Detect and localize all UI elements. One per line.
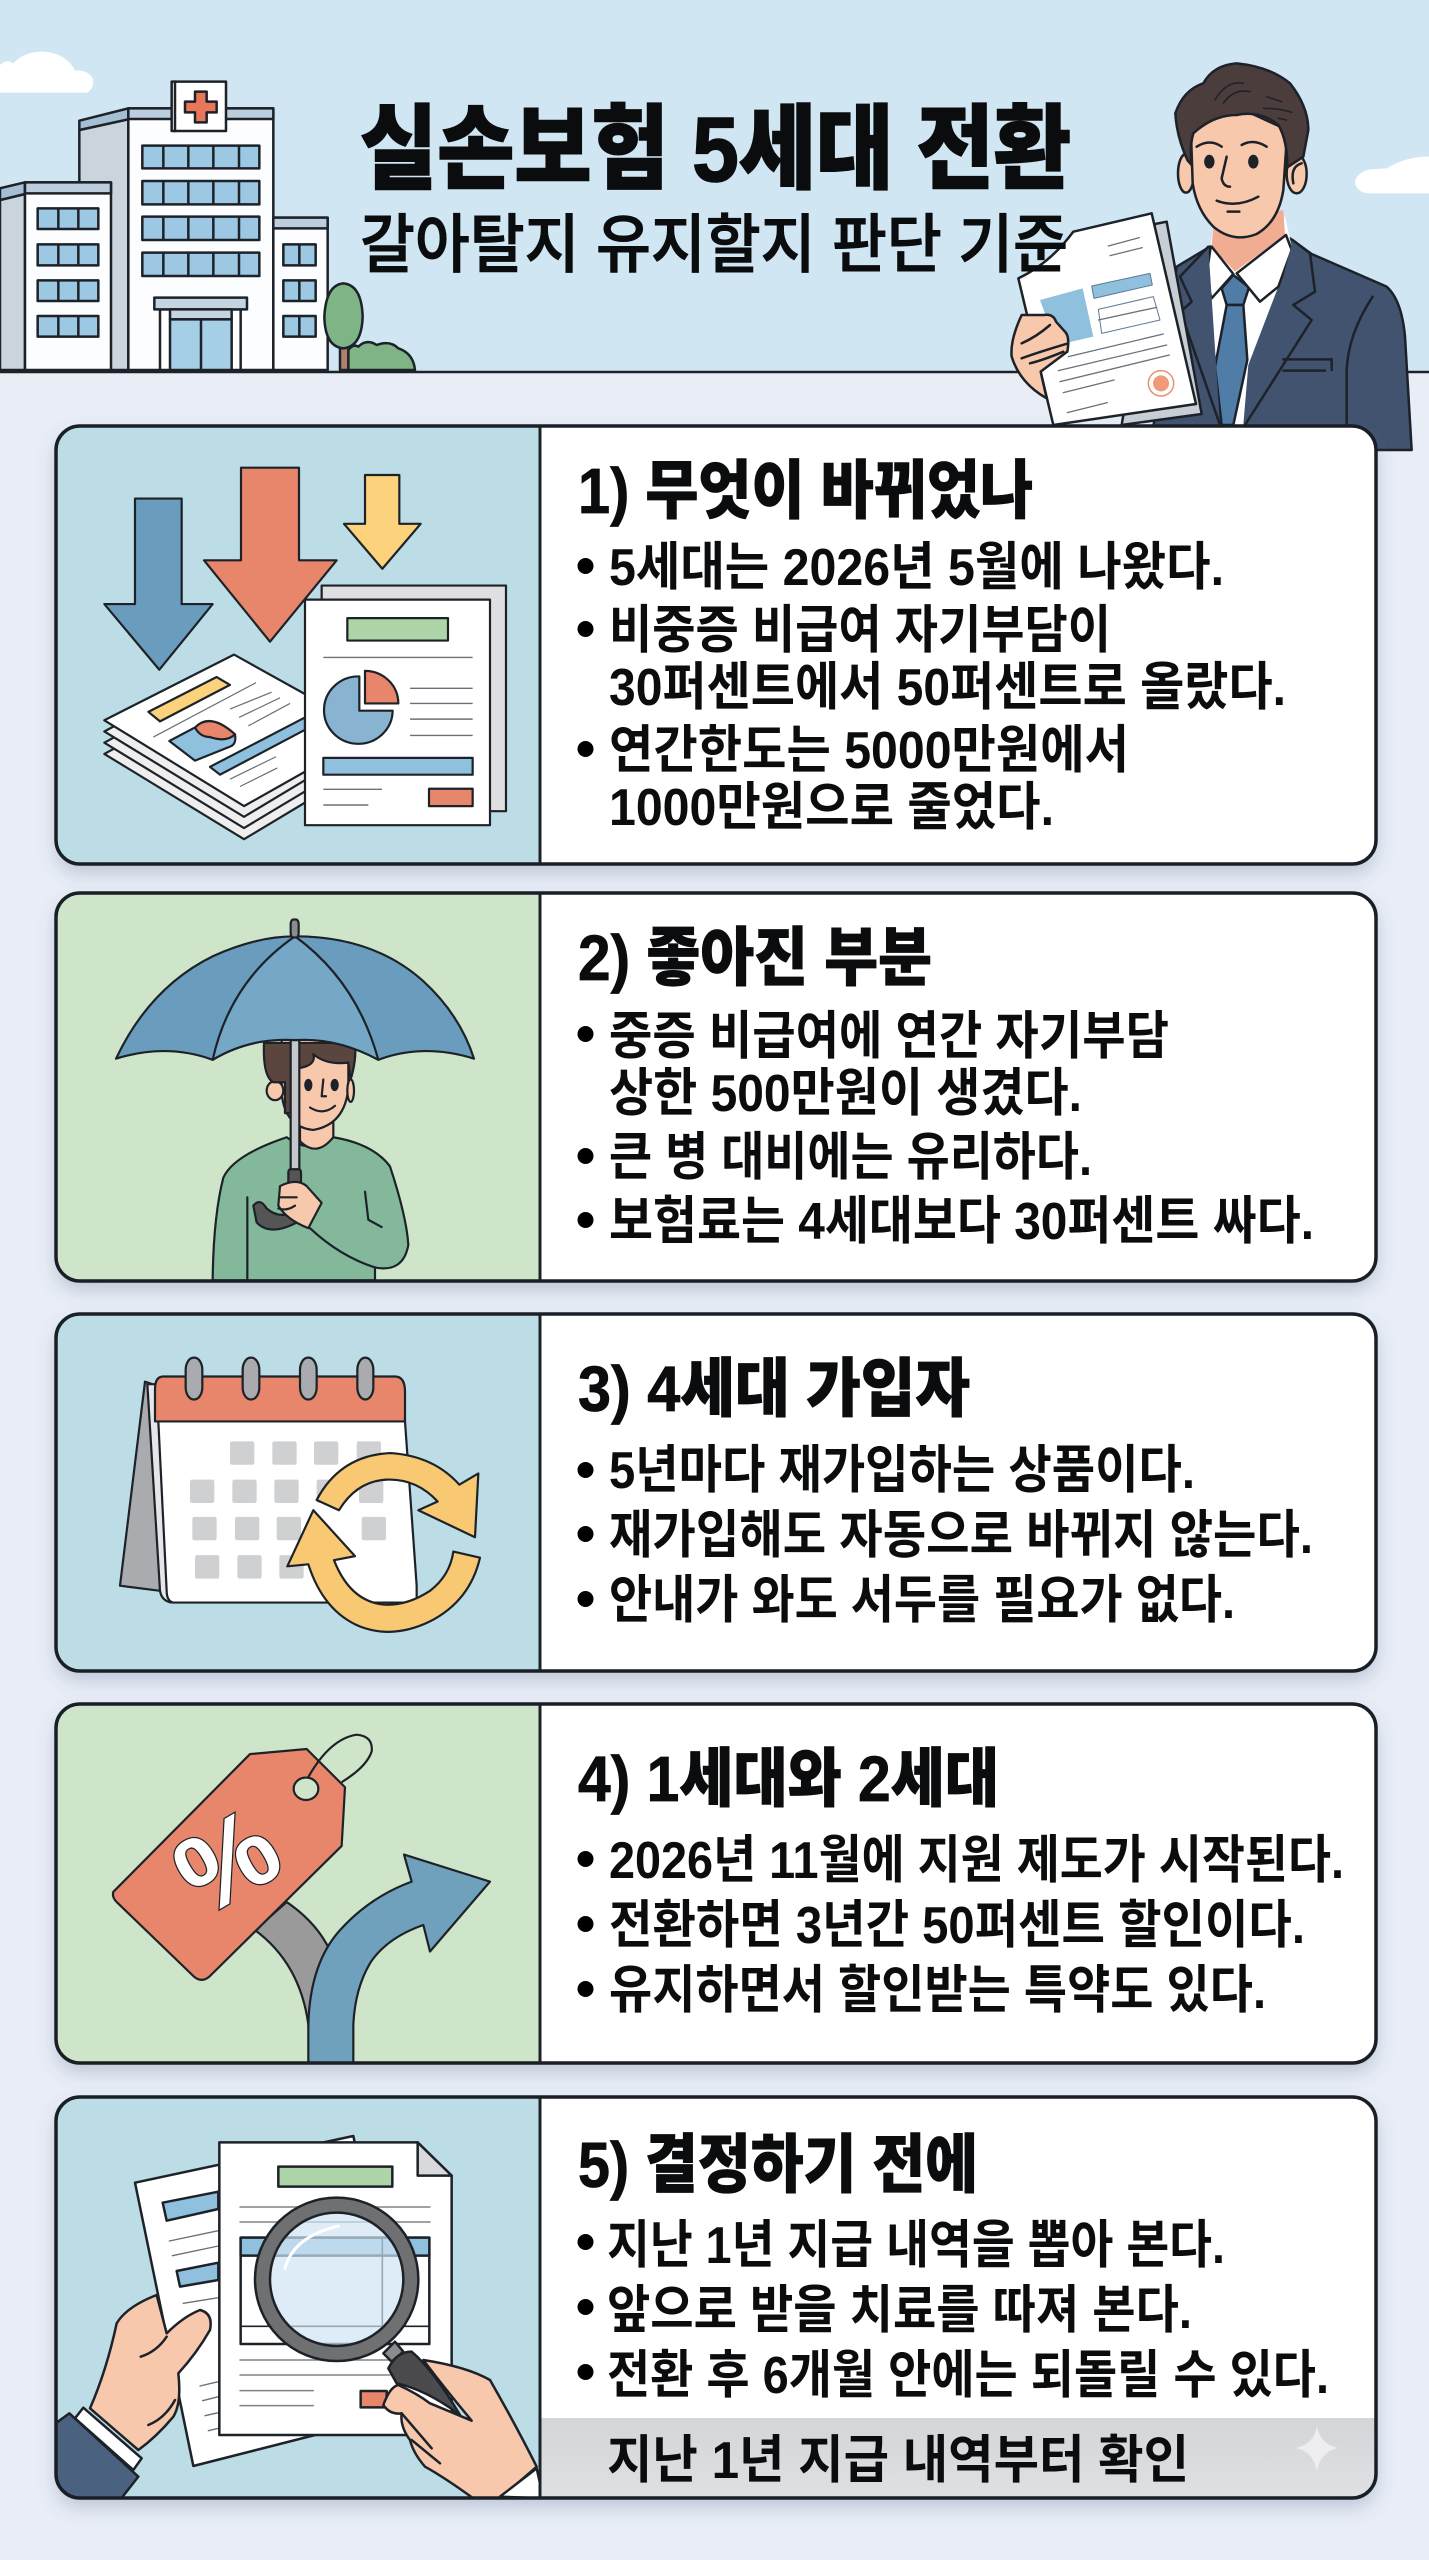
bullet list: 5년마다 재가입하는 상품이다. — [609, 1442, 1195, 1500]
subtitle: 갈아탈지 유지할지 판단 기준 — [360, 209, 1068, 281]
bullet list: 연간한도는 5000만원에서 — [609, 722, 1129, 780]
bullet list: 2026년 11월에 지원 제도가 시작된다. — [609, 1832, 1344, 1890]
heading: 5) 결정하기 전에 — [578, 2129, 978, 2201]
document held in hand — [1018, 213, 1202, 425]
icon: man in suit holding document — [1011, 63, 1429, 450]
icon: down arrows and documents — [104, 468, 506, 839]
icon: discount tag and forked arrow: % — [154, 1784, 300, 1939]
bullet list: 30퍼센트에서 50퍼센트로 올랐다. — [609, 659, 1286, 717]
icon: person under umbrella — [116, 919, 474, 1280]
bullet list — [578, 1008, 1314, 1251]
icon: sparkle — [1296, 2426, 1338, 2472]
bullet list: 중증 비급여에 연간 자기부담 — [609, 1008, 1169, 1066]
panel: 5) before deciding — [53, 2097, 1376, 2500]
panel: 1) what changed — [56, 426, 1376, 864]
icon: discount tag and forked arrow — [113, 1735, 490, 2063]
bullet list: 보험료는 4세대보다 30퍼센트 싸다. — [609, 1193, 1314, 1251]
heading: 1) 무엇이 바뀌었나 — [578, 455, 1033, 527]
summary strip: 지난 1년 지급 내역부터 확인 — [607, 2432, 1189, 2490]
heading: 3) 4세대 가입자 — [578, 1353, 970, 1425]
bullet list: 재가입해도 자동으로 바뀌지 않는다. — [609, 1507, 1313, 1565]
bullet list: 1000만원으로 줄었다. — [609, 779, 1054, 837]
icon: hands, documents and magnifier — [53, 2136, 543, 2500]
bullet list: 상한 500만원이 생겼다. — [609, 1065, 1082, 1123]
heading: 2) 좋아진 부분 — [578, 922, 932, 994]
bullet list — [578, 1832, 1344, 2020]
icon: hospital with tree and cloud — [0, 52, 415, 370]
icon: calendar with renewal arrows — [120, 1358, 480, 1632]
bullet list: 지난 1년 지급 내역을 뽑아 본다. — [607, 2217, 1225, 2275]
bullet list — [578, 1442, 1313, 1630]
bullet list: 전환하면 3년간 50퍼센트 할인이다. — [609, 1897, 1305, 1955]
summary strip — [540, 2418, 1376, 2498]
bullet list: 5세대는 2026년 5월에 나왔다. — [609, 539, 1224, 597]
panel: 4) 1st and 2nd generation — [56, 1704, 1376, 2063]
bullet list — [578, 539, 1286, 837]
bullet list: 앞으로 받을 치료를 따져 본다. — [607, 2282, 1192, 2340]
title: 실손보험 5세대 전환 — [360, 99, 1071, 201]
heading: 4) 1세대와 2세대 — [578, 1743, 999, 1815]
bullet list: 유지하면서 할인받는 특약도 있다. — [609, 1962, 1266, 2020]
header sky — [0, 0, 1429, 371]
bullet list — [578, 2217, 1329, 2405]
panel: 2) what improved — [56, 893, 1376, 1281]
bullet list: 전환 후 6개월 안에는 되돌릴 수 있다. — [607, 2347, 1329, 2405]
panel: 3) 4th generation subscribers — [56, 1314, 1376, 1671]
bullet list: 큰 병 대비에는 유리하다. — [609, 1129, 1092, 1187]
bullet list: 안내가 와도 서두를 필요가 없다. — [609, 1572, 1235, 1630]
bullet list: 비중증 비급여 자기부담이 — [609, 602, 1111, 660]
